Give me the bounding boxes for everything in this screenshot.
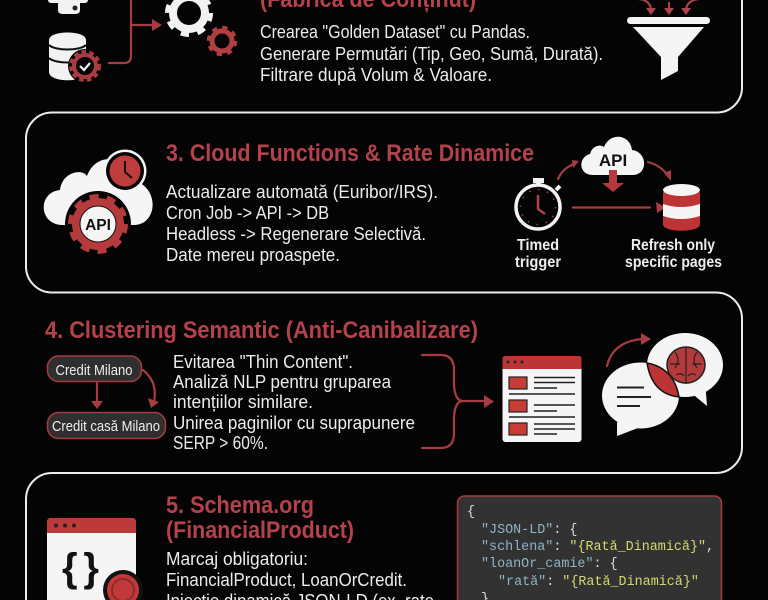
label: timed trigger: Timed (517, 237, 559, 254)
text block: panel 3: Cron Job -> API -> DB (166, 203, 329, 223)
icon: API cloud with clock and gear (44, 150, 153, 257)
text block: panel 2: Filtrare după Volum & Valoare. (260, 65, 492, 85)
code box: JSON-LD (458, 496, 722, 600)
code box: JSON-LD: "JSON-LD": { (481, 523, 577, 538)
text block: panel 5: Marcaj obligatoriu: (166, 549, 308, 569)
pill: Credit Milano (48, 356, 142, 382)
icon: database with check gear (49, 32, 102, 83)
text block: panel 4: Unirea paginilor cu suprapunere (173, 413, 415, 433)
code box: JSON-LD: { (467, 505, 475, 520)
icon: python logo (48, 0, 88, 14)
arrows: data flow (558, 160, 671, 213)
text block: panel 3: Headless -> Regenerare Selectivă. (166, 224, 426, 244)
heading: panel 5: 5. Schema.org (166, 492, 314, 519)
icon: merged page document (502, 356, 582, 442)
text block: panel 2: Crearea "Golden Dataset" cu Pandas. (260, 22, 530, 42)
label: refresh only specific pages (625, 237, 722, 271)
arrows: merge keywords (91, 370, 159, 409)
panel: 3 cloud functions (44, 137, 722, 271)
pill: Credit casa Milano (48, 412, 166, 438)
code box: JSON-LD: "schlena": "{Rată_Dinamică}", (481, 540, 714, 555)
panel: 4 semantic clustering (45, 317, 723, 453)
text block: panel 3: Actualizare automată (Euribor/IRS). (166, 182, 438, 202)
text block: panel 5 (166, 549, 434, 600)
label: timed trigger: trigger (515, 254, 561, 271)
label: refresh only specific pages: Refresh only (631, 237, 715, 254)
heading: panel 3: 3. Cloud Functions & Rate Dinamice (166, 140, 534, 167)
text block: panel 4 (173, 352, 415, 453)
icon: API cloud: API (599, 151, 627, 170)
heading: panel 5: (FinancialProduct) (166, 517, 354, 544)
text block: panel 4: intențiilor similare. (173, 392, 313, 412)
code box: JSON-LD: "loanOr_camie": { (481, 557, 618, 572)
text block: panel 3: Date mereu proaspete. (166, 245, 340, 265)
text block: panel 3 (166, 182, 438, 265)
code box: JSON-LD: "rată": "{Rată_Dinamică}" (498, 575, 699, 590)
panel: 2 content factory (48, 0, 710, 85)
pill: Credit Milano: Credit Milano (56, 363, 132, 379)
icon: chat bubbles with brain (602, 333, 723, 436)
icon: code window with seal: { } (62, 546, 99, 590)
text block: panel 5: FinancialProduct, LoanOrCredit. (166, 570, 407, 590)
label: timed trigger (515, 237, 561, 271)
pill: Credit casa Milano: Credit casă Milano (52, 419, 160, 435)
icon: database (663, 184, 700, 231)
panel: 5 schema markup (47, 492, 722, 600)
arrow: curved over chat (607, 333, 651, 366)
text block: panel 4: Evitarea "Thin Content". (173, 352, 353, 372)
icon: code window with seal (47, 518, 143, 600)
text block: panel 4: SERP > 60%. (173, 433, 268, 453)
label: refresh only specific pages: specific pages (625, 254, 722, 271)
arrow: brace to document (422, 355, 494, 448)
text block: panel 4: Analiză NLP pentru gruparea (173, 372, 392, 392)
heading: panel 5 (166, 492, 354, 544)
icon: stopwatch timed trigger (516, 178, 560, 229)
icon: gears (168, 0, 235, 54)
heading: panel 4: 4. Clustering Semantic (Anti-Canibalizare) (45, 317, 478, 344)
arrow: sources to gears (109, 0, 162, 63)
text block: panel 2 (260, 22, 603, 85)
icon: API cloud with clock and gear: API (85, 217, 111, 234)
icon: funnel (627, 0, 710, 80)
icon: API cloud (581, 137, 644, 192)
text block: panel 2: Generare Permutări (Tip, Geo, Sumă, Durată). (260, 44, 603, 64)
